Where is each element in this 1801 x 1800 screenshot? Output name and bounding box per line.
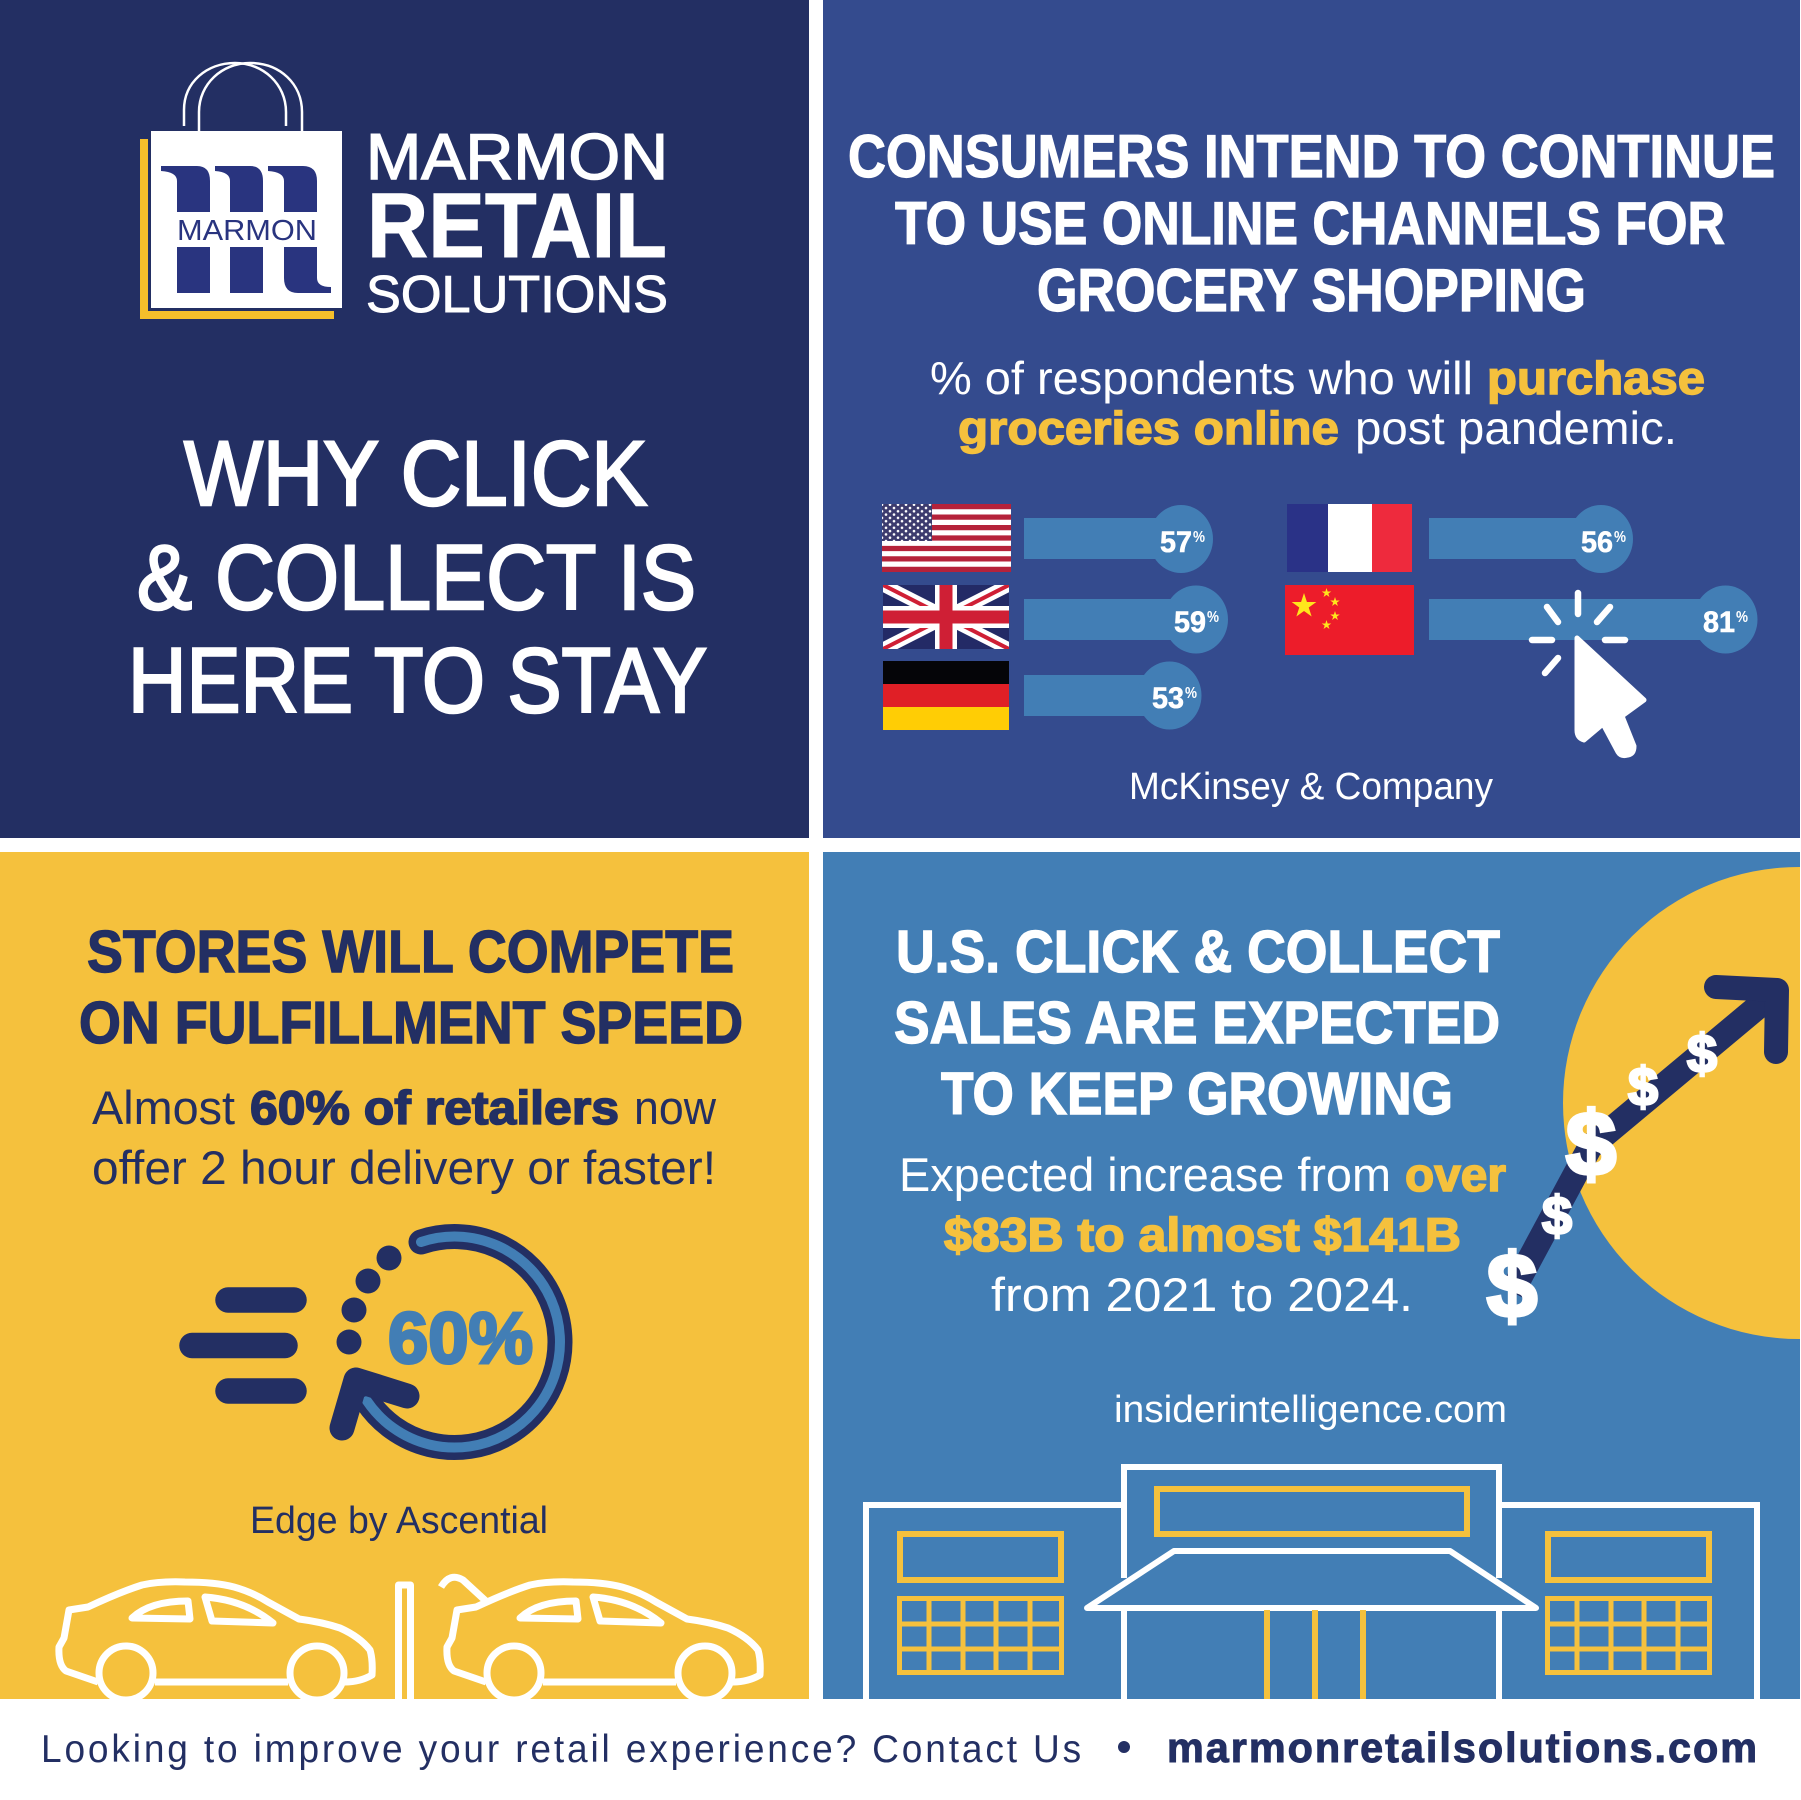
text: 60% of retailers bbox=[92, 1081, 717, 1194]
bar: USA 57%: % bbox=[1193, 529, 1205, 546]
illustration: cars at pickup bbox=[59, 1577, 760, 1715]
illustration: store front bbox=[866, 1467, 1757, 1699]
heading: U.S. click and collect: U.S. CLICK & COLLECT bbox=[896, 919, 1500, 985]
flag: UK bbox=[883, 585, 1009, 649]
icon: speed lines bbox=[192, 1300, 294, 1391]
store signs bbox=[900, 1489, 1709, 1580]
building outline bbox=[866, 1467, 1757, 1699]
flag: Germany bbox=[883, 661, 1009, 730]
icon: growth arrow with dollars: $ bbox=[1628, 1057, 1658, 1117]
heading: U.S. click and collect: SALES ARE EXPECTED bbox=[894, 990, 1500, 1056]
flag: France bbox=[1287, 504, 1412, 572]
bar: USA 57% bbox=[1024, 505, 1213, 573]
bar: France 56%: % bbox=[1614, 529, 1626, 546]
title: why click and collect is here to stay: WHY CLICK bbox=[184, 423, 647, 525]
text: expected increase: over bbox=[1405, 1148, 1506, 1201]
text: expected increase: from 2021 to 2024. bbox=[991, 1268, 1413, 1321]
heading: consumers intend to continue: GROCERY SHOPPING bbox=[1037, 257, 1586, 324]
heading: U.S. click and collect: TO KEEP GROWING bbox=[941, 1061, 1453, 1127]
heading: consumers intend to continue bbox=[848, 123, 1775, 324]
icon: mouse cursor click bbox=[1532, 593, 1644, 756]
text: 60% of retailers: Almost bbox=[92, 1081, 235, 1134]
bar: China 81%: % bbox=[1736, 609, 1748, 626]
panel: consumers online grocery bbox=[823, 0, 1800, 838]
bar: France 56%: 56 bbox=[1581, 526, 1613, 559]
panel: fulfillment speed bbox=[0, 852, 809, 1715]
icon: car right with open trunk bbox=[441, 1577, 760, 1700]
heading: stores will compete bbox=[79, 919, 743, 1056]
logo: wordmark: MARMON bbox=[366, 120, 668, 193]
bar: Germany 53%: % bbox=[1185, 685, 1197, 702]
source: McKinsey and Company: McKinsey & Company bbox=[1129, 766, 1493, 808]
text: percent of respondents: post pandemic. bbox=[1355, 402, 1677, 454]
bar: UK 59%: 59 bbox=[1174, 606, 1206, 639]
text: expected increase bbox=[899, 1148, 1506, 1321]
icon: speed dots bbox=[336, 1246, 402, 1354]
text: percent of respondents bbox=[930, 352, 1705, 454]
icon: car left bbox=[59, 1582, 372, 1700]
logo: wordmark: SOLUTIONS bbox=[366, 266, 668, 324]
bar: UK 59%: % bbox=[1207, 609, 1219, 626]
panel: logo and title bbox=[0, 0, 809, 838]
footer: contact line: marmonretailsolutions.com bbox=[1167, 1724, 1759, 1771]
flag: USA bbox=[882, 504, 1011, 572]
bar: France 56% bbox=[1429, 505, 1633, 573]
bar: UK 59% bbox=[1024, 586, 1228, 654]
text: 60% of retailers: now bbox=[634, 1081, 717, 1134]
bar: Germany 53%: 53 bbox=[1152, 682, 1184, 715]
right window grid bbox=[1547, 1598, 1710, 1672]
source: Edge by Ascential: Edge by Ascential bbox=[250, 1500, 548, 1542]
text: percent of respondents: purchase bbox=[1487, 352, 1705, 404]
stat: 60%: 60% bbox=[388, 1299, 533, 1379]
logo: wordmark: RETAIL bbox=[367, 175, 667, 277]
heading: stores will compete: STORES WILL COMPETE bbox=[87, 919, 734, 985]
heading: U.S. click and collect bbox=[894, 919, 1500, 1127]
icon: growth arrow with dollars: $ bbox=[1542, 1186, 1572, 1246]
bar: USA 57%: 57 bbox=[1160, 526, 1192, 559]
icon: growth arrow with dollars: $ bbox=[1487, 1237, 1537, 1337]
flag: China bbox=[1285, 585, 1414, 655]
bar: China 81% bbox=[1429, 586, 1758, 654]
icon: growth arrow with dollars: $ bbox=[1687, 1024, 1717, 1084]
decoration: yellow circle bbox=[1563, 867, 1801, 1339]
text: percent of respondents: % of respondents who will bbox=[930, 352, 1473, 404]
awning bbox=[1087, 1551, 1536, 1608]
footer: contact line bbox=[41, 1724, 1759, 1771]
text: 60% of retailers: 60% of retailers bbox=[250, 1081, 619, 1134]
title: why click and collect is here to stay: & COLLECT IS bbox=[137, 527, 696, 629]
heading: stores will compete: ON FULFILLMENT SPEED bbox=[79, 990, 743, 1056]
title: why click and collect is here to stay: HERE TO STAY bbox=[128, 630, 707, 732]
footer: contact line: Looking to improve your retail experience? Contact Us bbox=[41, 1728, 1084, 1771]
logo: shopping bag: MARMON bbox=[177, 215, 317, 247]
icon: growth arrow with dollars: $ bbox=[1566, 1095, 1616, 1195]
text: 60% of retailers: offer 2 hour delivery or faster! bbox=[92, 1141, 716, 1194]
icon: growth arrow with dollars bbox=[1487, 987, 1778, 1337]
store doors bbox=[1267, 1610, 1363, 1699]
bar: China 81%: 81 bbox=[1703, 606, 1735, 639]
title: why click and collect is here to stay bbox=[128, 423, 707, 732]
logo: shopping bag bbox=[140, 63, 342, 319]
source: insiderintelligence.com: insiderintelligence.com bbox=[1114, 1389, 1507, 1431]
bar: Germany 53% bbox=[1024, 662, 1202, 730]
panel: sales growth bbox=[823, 852, 1801, 1699]
text: expected increase: $83B to almost $141B bbox=[944, 1208, 1461, 1261]
logo: wordmark bbox=[366, 120, 668, 324]
icon: bollard bbox=[398, 1585, 410, 1715]
text: percent of respondents: groceries online bbox=[958, 402, 1339, 454]
icon: circular arrow bbox=[342, 1237, 560, 1448]
left window grid bbox=[899, 1598, 1062, 1672]
text: expected increase: Expected increase from bbox=[899, 1148, 1391, 1201]
